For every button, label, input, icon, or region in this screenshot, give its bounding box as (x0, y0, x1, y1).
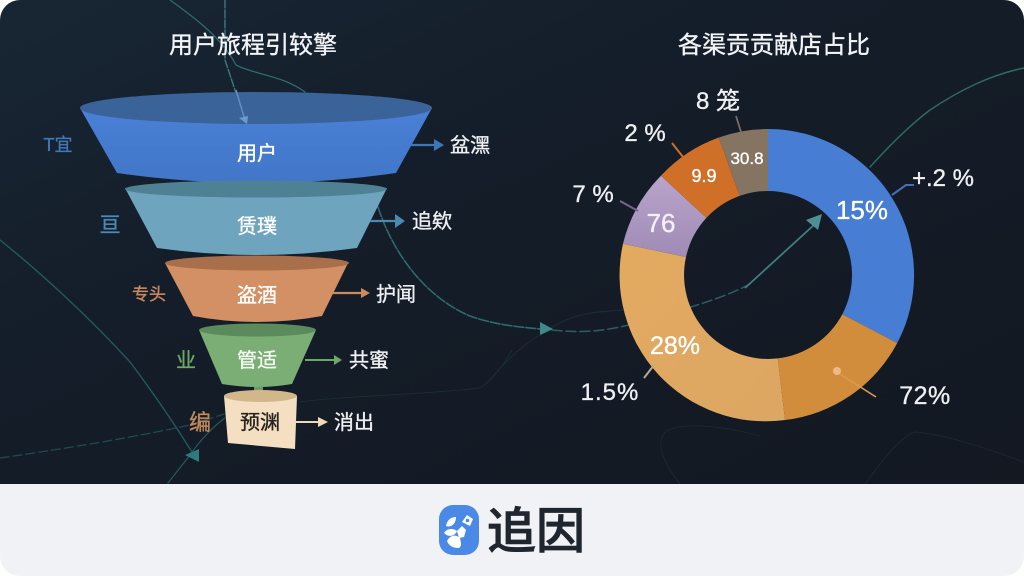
title: donut: 各渠贡贡献店占比 (678, 32, 870, 59)
arrow label 5 (295, 412, 372, 432)
left labels (44, 135, 211, 435)
funnel level 1: blue: 用户 (237, 142, 277, 165)
callout: 2%: 2 % (624, 120, 666, 147)
callout: 2% (624, 120, 683, 157)
arrow label 4: 共蜜 (349, 349, 389, 372)
segment: light orange (620, 244, 785, 421)
callout: 7% (572, 181, 638, 211)
segment: blue (768, 129, 914, 343)
value: 28%: 28% (650, 332, 700, 360)
dot marker (833, 367, 841, 375)
right labels with arrows (295, 134, 490, 434)
footer band (0, 484, 1024, 576)
arrow label 2 (370, 210, 452, 230)
brand name: 追因 (487, 492, 585, 563)
funnel chart (80, 90, 432, 449)
value: 15%: 15% (836, 195, 888, 225)
segment: brown (719, 129, 768, 196)
callout: +.2%: +.2 % (912, 165, 974, 192)
left label 4: 业 (176, 349, 196, 372)
value: 76: 76 (647, 208, 675, 238)
callout: 8%: 8 笼 (696, 88, 740, 115)
segment: dark orange (778, 314, 897, 420)
title: funnel: 用户旅程引较擎 (169, 32, 337, 59)
arrowhead: flow arrow middle (540, 322, 553, 335)
value: 9.9: 9.9 (691, 166, 717, 186)
callout: 1.5% (581, 365, 654, 406)
funnel level 2: teal (125, 180, 387, 255)
arrow label 1 (411, 134, 490, 154)
arrow label 4 (305, 350, 388, 370)
arrow label 3: 护闻 (376, 283, 416, 306)
callout: 72% (840, 374, 951, 410)
left label 5: 编 (189, 410, 211, 435)
funnel level 5: cream: 预渊 (240, 411, 280, 434)
value: 30.8: 30.8 (730, 149, 764, 168)
arrow label 5: 消出 (334, 411, 374, 434)
segment: purple (623, 176, 706, 257)
callout: +.2% (892, 165, 974, 195)
funnel level 4: green (199, 324, 316, 391)
funnel level 4: green: 管适 (237, 349, 277, 372)
callout: 7%: 7 % (572, 181, 614, 208)
funnel level 3: orange: 盗酒 (237, 284, 277, 307)
funnel level 5: cream (224, 390, 297, 449)
arrow label 3 (333, 284, 414, 304)
callout: 8% (696, 88, 741, 132)
segment: burnt orange (661, 138, 740, 218)
icon: logo (439, 505, 479, 555)
arrowhead: flow arrow lower left (185, 449, 199, 462)
callout: 1.5%: 1.5% (581, 379, 639, 406)
arrow label 1: 盆潶 (450, 134, 490, 157)
inner flow arrow (745, 214, 822, 288)
left label 2: 亘 (100, 214, 120, 237)
left label 1: T宜 (44, 135, 72, 155)
funnel level 1: blue (80, 90, 432, 183)
funnel level 3: orange (165, 256, 349, 322)
left label 3: 专头 (132, 285, 166, 304)
funnel level 2: teal: 赁璞 (237, 215, 277, 238)
donut chart (620, 129, 914, 421)
arrow label 2: 追欸 (412, 210, 452, 233)
callout: 72%: 72% (899, 382, 951, 410)
